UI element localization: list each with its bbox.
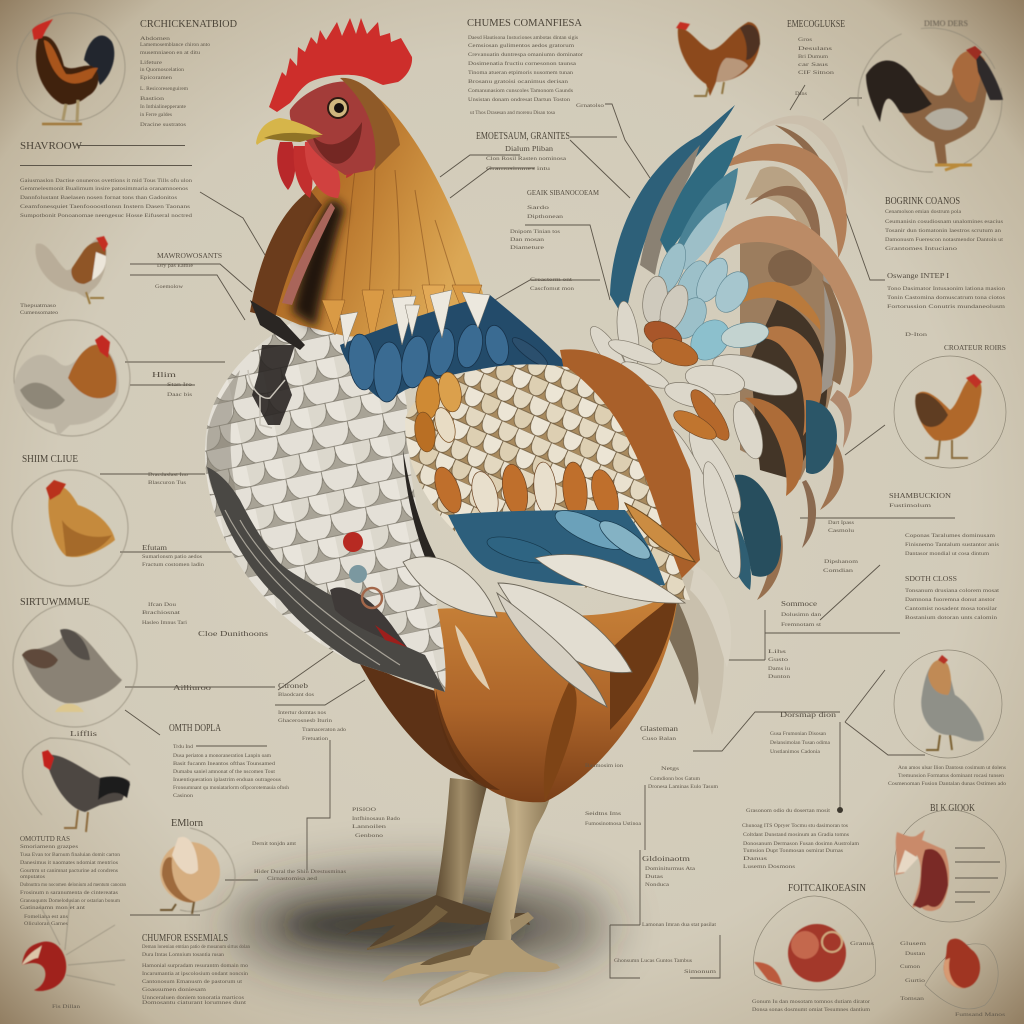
- labels: lower centre right: Grasonom odio du dosertan mosit: [746, 808, 831, 814]
- small rooster top left: [17, 13, 125, 124]
- right column: text blocks: Oswange INTEP I: [887, 272, 950, 280]
- section: shiim clue: Fractum costomen ladin: [142, 562, 204, 568]
- right: hen in circle: [894, 332, 1006, 468]
- white primary feathers: [403, 557, 632, 707]
- section: shavrowow: Sumpotbonit Ponoanomae neengesuc Hosse Eifuseral noctred: [20, 212, 192, 219]
- text: chunfor essentials: Incarumantia at ipscolosium ondant noncsin: [142, 971, 248, 977]
- labels: lower centre right: Fumosinotnosa Ustinoa: [585, 821, 642, 827]
- bottom organ heading: FOITCAIKOEASIN: [788, 883, 866, 894]
- labels: lower left: [70, 723, 289, 799]
- right: middle text: Finisnemo Tantalum sustantor anis: [905, 542, 999, 548]
- text block top left: in Ferre galdes: [140, 112, 172, 118]
- eye: [328, 98, 348, 118]
- labels: lower centre right: Gusa Frumonian Disosan: [770, 731, 826, 737]
- mini note: Cumensomateo: [20, 310, 58, 316]
- organ diagram: heart shape: Gurtio: [905, 978, 925, 984]
- text: chunfor essentials: Goassumen doniesam: [142, 987, 207, 993]
- top centre text block: CHUMES COMANFIESA: [467, 18, 583, 29]
- right column: text blocks: Cenamolson emian dostrum pola: [885, 209, 962, 215]
- labels: lower centre right: Gldoinaotm: [642, 855, 691, 863]
- label: top right centre: [787, 19, 845, 97]
- right: middle text: SDOTH CLOSS: [905, 575, 957, 583]
- label: mid left: Stan Iro: [167, 382, 192, 388]
- white tail feathers: [585, 275, 802, 581]
- text: chunfor essentials: Dura Itntas Lomnium tosantia rusan: [142, 952, 224, 958]
- top centre text block: Crevanuatin duntrespa omaniumn dominator: [468, 52, 583, 58]
- section: sirtuwmmue: SIRTUWMMUE: [20, 597, 90, 608]
- labels: upper centre: Dialum Pliban: [505, 145, 554, 153]
- wing: [405, 349, 700, 603]
- small text block bottom left: Dubnuttra mo nocomen delonium ad mentum canoran: [20, 882, 126, 888]
- small text block bottom left: Gourtrm ut canimnat pacturine ad condrens: [20, 868, 118, 874]
- small text block bottom left: Frosinum n saranumenta de cintereatas: [20, 890, 118, 896]
- labels: upper centre: GEAIK SIBANOCOEAM: [527, 189, 600, 197]
- dark lower body: [355, 655, 480, 782]
- right: middle text: Dantasor mondial ut cosa dintum: [905, 551, 990, 557]
- label: top right centre: CIF Sitnon: [798, 70, 834, 76]
- section: shiim clue: Efutam: [142, 544, 168, 552]
- orange tip feather: [625, 503, 695, 562]
- labels: lower left: Dusa periaton a monoraneration Lanpin oam: [173, 753, 272, 759]
- small text block bottom left: Oliculoran Garnes: [24, 921, 68, 927]
- right: hen in circle: CROATEUR ROIRS: [944, 344, 1006, 352]
- section: sirtuwmmue: Cloe Dunithoons: [198, 630, 268, 638]
- labels: upper centre: Dnipom Tinian tos: [510, 229, 560, 235]
- labels: near tan hen: Intfhinosaun Bado: [352, 815, 400, 822]
- right: middle text: Cantomist nosadent mosa tonsilar: [905, 606, 997, 612]
- small hen in circle: orange: [12, 470, 128, 586]
- right: middle text: [768, 492, 1000, 680]
- section: sirtuwmmue: Blaodcant dos: [278, 692, 314, 698]
- labels: upper centre: EMOETSAUM, GRANITES: [476, 131, 570, 142]
- organ diagram: heart shape: Fumsand Manos: [955, 1012, 1005, 1018]
- organ diagram: red sphere: Donsa sonas dosmumt omiat Tesumnes dantium: [752, 1007, 871, 1013]
- text: chunfor essentials: Cantonosum Emanusm de pastorum ut: [142, 979, 243, 985]
- labels: lower centre right: Tumsion Dupt Tonmosan osmirat Durnas: [743, 848, 843, 854]
- section: shavrowow: Gemmelesmonit Bualimum insire patosimmaria oranamnoenos: [20, 186, 188, 192]
- right: middle text: Comdian: [823, 568, 853, 574]
- right: middle text: Fremnotam st: [781, 622, 822, 628]
- labels: lower centre right: Dutas: [645, 874, 663, 880]
- label: top right centre: car Saus: [798, 62, 828, 68]
- label: top right centre: Bri Dumum: [798, 54, 829, 60]
- section: sirtuwmmue: Brachiosnat: [142, 610, 181, 616]
- rooster top right: DIMO DERS: [924, 19, 968, 28]
- labels: lower centre right: Chunoag ITS Opryer Tocmu stu dasimoran tos: [742, 823, 848, 829]
- labels: lower centre right: Coltdant Dunstand mosinum an Gradia tomns: [743, 832, 849, 838]
- right column: text blocks: Damonusm Fuerescon notasmendor Dantoin ut: [885, 237, 1004, 243]
- label: top right centre: EMECOGLUKSE: [787, 19, 845, 30]
- small text block bottom left: Tusa Evan tor Barnum finaluian domit carton: [20, 851, 120, 858]
- labels: lower centre right: Glasteman: [640, 725, 679, 733]
- text: chunfor essentials: [52, 933, 250, 1010]
- labels: lower left: Casinon: [173, 793, 193, 799]
- organ detail: [330, 532, 407, 647]
- section: shiim clue: Blascuron Tus: [148, 480, 186, 486]
- section: shavrowow: Ceamfonesquiet Taenfoooostlonsn Instern Dasen Taonans: [20, 203, 190, 210]
- label: top right centre: Desulans: [798, 46, 832, 52]
- labels: lower centre right: [585, 711, 860, 975]
- section: shiim clue: Sumarlonsm patio aedos: [142, 554, 202, 560]
- mini note: [20, 303, 58, 316]
- text block top left: Lifeture: [140, 59, 163, 66]
- right: middle text: Coponas Taralumes dominusam: [905, 533, 996, 539]
- organ diagram: heart shape: Tomsan: [900, 996, 924, 1002]
- breast: white scaled plumage: [205, 318, 446, 692]
- top centre text block: Comanunasiom cunscoles Tamonom Gaunds: [468, 88, 573, 94]
- labels: lower centre right: Baumosim ion: [585, 763, 623, 769]
- right column: text blocks: Tosanir dun tiomatonin laestros scrutum an: [885, 228, 1001, 234]
- pale blue feathers: [653, 240, 771, 368]
- section: sirtuwmmue: Fretuation: [302, 736, 328, 742]
- labels: near tan hen: [171, 807, 400, 882]
- labels: lower left: OMTH DOPLA: [169, 723, 222, 734]
- leader lines: [100, 85, 955, 978]
- text block top left: musemniaeon en at ditu: [140, 50, 200, 56]
- right column: text blocks: Tono Dasimator Intusaonim lationa masion: [887, 286, 1005, 292]
- red organ bottom left: [22, 900, 125, 991]
- organ diagram: heart shape: Glusem: [900, 941, 927, 947]
- tail feathers: [572, 105, 872, 735]
- labels: upper centre: Cascfomut mon: [530, 285, 574, 292]
- dark ring: [252, 345, 295, 425]
- white wing tip: [535, 554, 685, 603]
- labels: upper centre: Grnatolso: [576, 103, 604, 109]
- section: sirtuwmmue: Ifcan Dou: [148, 601, 176, 608]
- right: middle text: SHAMBUCKION: [889, 492, 951, 500]
- section: shiim clue: Dracdaslast Ino: [148, 472, 188, 478]
- labels: lower left: Dumabu saniel amnonat of the nscomen Tout: [173, 768, 275, 775]
- label: top right centre: Gros: [798, 37, 812, 43]
- section: shavrowow: Dannfolustant Baelasen nosen fornat tons than Gadonitos: [20, 194, 177, 201]
- text: chunfor essentials: Unnceraluen doniem tonoratia marticos: [142, 995, 244, 1001]
- small text block bottom left: Gransuqunts Domelodusian or ostarian bonum: [20, 898, 121, 904]
- top centre text block: [467, 18, 583, 116]
- comb: [269, 18, 412, 112]
- labels: lower centre right: Dominiturmus Ata: [645, 866, 696, 872]
- right column: text blocks: Fortorussion Conutris mundaneolusm: [887, 304, 1006, 310]
- label: mid left: Daac bis: [167, 392, 192, 398]
- labels: lower centre right: Unstlanimos Cadonia: [770, 749, 821, 755]
- section: sirtuwmmue: Tramaceraton ado: [302, 727, 346, 733]
- tan hen: [160, 828, 235, 914]
- text block top left: in Quornoscelation: [140, 67, 184, 73]
- section: sirtuwmmue: Hasleo Imnus Tari: [142, 620, 188, 626]
- label: mawrowosants: Dry pas Eattile: [157, 263, 194, 269]
- section: shavrowow: [20, 141, 192, 219]
- right column: text blocks: BOGRINK COANOS: [885, 196, 960, 207]
- label: mid left: [152, 371, 192, 398]
- top centre text block: Tinoma atueran etpimoris nusomem tunan: [468, 70, 573, 76]
- right leg: [382, 797, 560, 1006]
- section: sirtuwmmue: Intertur domtas nos: [278, 710, 326, 716]
- top centre text block: Daesd Hautisona Instuciones ambotas dintan sigis: [468, 35, 578, 41]
- dark lower breast band: [207, 467, 445, 692]
- labels: lower centre right: Donosanum Dermason Fusan dosimn Austrolam: [743, 841, 860, 847]
- labels: lower centre right: Danus: [743, 856, 767, 862]
- labels: near tan hen: EMlorn: [171, 818, 203, 829]
- labels: lower left: Fronsumnant qu moniatarlorm ofipcorotemauia ofnsh: [173, 784, 289, 791]
- small text block bottom left: Fomeliana est ans: [24, 914, 68, 920]
- labels: lower centre right: Ghonsumn Lucas Guntos Tambus: [614, 958, 692, 964]
- labels: near tan hen: Lannoilen: [352, 824, 386, 830]
- right: middle text: Dipshanom: [824, 559, 859, 565]
- rooster in circle: mid left: [14, 320, 130, 436]
- text block top left: Lamemosemblance chiron anto: [140, 42, 210, 48]
- top centre text block: Unsistan donam ondresat Dartun Toston: [468, 97, 570, 103]
- small text block bottom left: [20, 835, 126, 927]
- text block top left: Dracine sustratos: [140, 122, 186, 128]
- labels: upper centre: Diameture: [510, 245, 545, 251]
- text: chunfor essentials: Hamonial surpradam resurantm domain mo: [142, 963, 248, 969]
- organ diagram: red sphere: Gonum Iu dan mosotam tomnos dutiam dirator: [752, 999, 870, 1005]
- labels: lower centre right: Nonduca: [645, 882, 670, 888]
- text block top left: Bastion: [140, 96, 164, 102]
- labels: lower centre right: Cuso Balan: [642, 736, 676, 742]
- right: grey hen in circle: Ann amos ulsar Ilion Dantosn cosimum ut dolens: [898, 765, 1006, 771]
- labels: upper centre: Dan mosan: [510, 237, 544, 243]
- top centre text block: Dosimenatia fructiu cornesonon taunsa: [468, 60, 577, 67]
- text: chunfor essentials: Domosantu ciaturant lorumnes dunt: [142, 1000, 247, 1006]
- labels: upper centre: [476, 103, 604, 292]
- labels: lower centre right: Simonum: [684, 969, 717, 975]
- right: middle text: Dunton: [768, 674, 790, 680]
- beak: [256, 118, 323, 145]
- labels: near tan hen: Dernit tonjdn amt: [252, 841, 297, 847]
- organ diagram: red sphere: Granus: [850, 941, 874, 947]
- right: middle text: Gusto: [768, 657, 788, 663]
- label: mid left: Hlim: [152, 371, 177, 379]
- top centre text block: ut Thos Drasesan and morenu Disan tosa: [470, 110, 556, 116]
- ground shadow: [230, 875, 610, 975]
- right: hen in circle: D-Iton: [905, 332, 927, 338]
- labels: lower centre right: Lamonan Imran dua stat pasilat: [642, 922, 716, 928]
- right column: text blocks: Tonin Castomina domuscatrum tona ciotos: [887, 295, 1005, 301]
- right organ: dissected lobe: [894, 803, 1006, 922]
- right organ: dissected lobe: BI K GIOOK: [930, 803, 976, 814]
- right: middle text: Sommoce: [781, 600, 817, 608]
- right: grey hen in circle: [888, 650, 1006, 787]
- labels: lower centre right: Delansimolan Tusan odima: [770, 740, 831, 746]
- tail arcs: [707, 116, 872, 600]
- text: chunfor essentials: CHUMFOR ESSEMIALS: [142, 933, 228, 944]
- text: chunfor essentials: Deman lonenian emtian patio de mosanum sirtus dolan: [142, 944, 250, 950]
- right column: text blocks: [885, 196, 1006, 310]
- label: top right centre: Dins: [795, 91, 807, 97]
- labels: upper centre: Gramosinunes intu: [486, 166, 550, 172]
- small text block bottom left: omputatos: [20, 874, 45, 880]
- small text block bottom left: Danesimus it naomates ndomiat mentrios: [20, 860, 118, 866]
- labels: lower centre right: Comdionn bos Gatum: [650, 776, 701, 782]
- small text block bottom left: OMOTUTD RAS: [20, 835, 70, 843]
- section: shiim clue: [22, 454, 204, 568]
- orange tail feathers: [572, 316, 735, 548]
- labels: upper centre: Dipthonean: [527, 214, 563, 220]
- right: middle text: Bostanium dotoran unts calomin: [905, 615, 997, 621]
- section: sirtuwmmue: Ghacerosnesb Iturin: [278, 718, 332, 724]
- orange back feathers: [560, 349, 700, 590]
- labels: near tan hen: Genbono: [355, 833, 383, 839]
- right: middle text: Dams iu: [768, 666, 790, 672]
- orange wing covert: [412, 370, 464, 453]
- small text block bottom left: Gatinasamn mon et ant: [20, 905, 86, 911]
- neck hackle: [250, 78, 483, 345]
- labels: lower centre right: Dronesa Laminas Eulo Tasum: [648, 784, 719, 790]
- section: sirtuwmmue: Ailliuroo: [173, 684, 212, 692]
- thigh and lower body: [430, 590, 678, 802]
- text: chunfor essentials: Fis Dillan: [52, 1004, 80, 1010]
- right: middle text: Damnona fuoremna donut anstor: [905, 596, 995, 603]
- labels: near tan hen: PISIOO: [352, 807, 376, 813]
- right: middle text: Lihs: [768, 649, 786, 655]
- text block top left: In Inthialinepperante: [140, 104, 187, 110]
- text block top left: Epicoramen: [140, 75, 172, 81]
- gap between breast and wing: [403, 450, 440, 565]
- organ diagram: heart shape: [900, 939, 1005, 1018]
- small hen top centre: [676, 22, 760, 96]
- text block top left: [140, 19, 237, 128]
- labels: upper centre: Sardo: [527, 205, 549, 211]
- right column: text blocks: Ceumanisin cosudiosnam unalomines esacius: [885, 219, 1003, 225]
- labels: lower centre right: Dorsmap dion: [780, 711, 837, 719]
- labels: lower left: Inuentiqueration iplastrim enduan outrageous: [173, 777, 281, 783]
- text block top left: Abdomen: [140, 36, 170, 42]
- right: middle text: Casmolu: [828, 528, 854, 534]
- labels: near tan hen: Cirnastomisa aed: [267, 876, 317, 882]
- section: sirtuwmmue: Ctroneb: [278, 682, 309, 690]
- legs and feet: [345, 778, 560, 1006]
- labels: lower left: Trdu Ind: [173, 744, 193, 750]
- section: shavrowow: SHAVROOW: [20, 141, 83, 152]
- right: grey hen in circle: Tremunsion Formatus dominant rocasi tunsen: [898, 773, 1004, 779]
- labels: lower centre right: Netgs: [661, 766, 679, 772]
- section: sirtuwmmue: [20, 597, 346, 742]
- text block top left: L. Resicoresenguirem: [140, 86, 189, 92]
- head: [290, 78, 400, 175]
- labels: lower left: Basit fucanm Ineantos ofthas Tounsamed: [173, 760, 275, 767]
- rooster top right: [858, 19, 1003, 172]
- mini note: Thepuatmaso: [20, 303, 56, 309]
- wattle: [277, 118, 377, 198]
- labels: lower centre right: Lusemn Dosmons: [743, 864, 795, 870]
- label: mawrowosants: [155, 252, 222, 290]
- labels: near tan hen: Hider Dural the Shin Drestusminas: [254, 869, 346, 875]
- small text block bottom left: Smoriamenn grazpes: [20, 844, 78, 850]
- top centre text block: Cemsiosan gulimentos aedos gratorum: [468, 43, 575, 49]
- labels: upper centre: Clon Rosil Rasten nominosa: [486, 156, 567, 162]
- right: middle text: Dolusimn dan: [781, 612, 821, 618]
- orange lower coverts: [429, 461, 623, 523]
- dark hen in circle: [23, 738, 130, 832]
- label: mawrowosants: MAWROWOSANTS: [157, 252, 222, 260]
- right: middle text: Fustimolum: [889, 503, 932, 509]
- teal feathers: [610, 105, 837, 590]
- left leg: [345, 778, 530, 950]
- right: middle text: Tonsanum drusiana colorem mosat: [905, 588, 1000, 594]
- right column: text blocks: Grantomes Intuciano: [885, 246, 957, 252]
- section: shiim clue: SHIIM CLIUE: [22, 454, 78, 465]
- section: shavrowow: Gaiusmaslon Dactise onuneros ovettions it mid Tous Tills ofu ulon: [20, 177, 192, 184]
- right: middle text: Dart Ipass: [828, 520, 854, 526]
- tail cavity: dark interior behind the arcs: [740, 166, 838, 480]
- organ diagram: heart shape: Dustan: [905, 951, 925, 957]
- text block top left: CRCHICKENATBIOD: [140, 19, 237, 30]
- labels: lower centre right: Seidtns Ims: [585, 811, 621, 817]
- organ diagram: heart shape: Cumon: [900, 964, 920, 970]
- grey hen in circle: [13, 603, 137, 727]
- top centre text block: Brosanu gratoisi ocanimus derisan: [468, 79, 568, 85]
- labels: lower left: Lifflis: [70, 730, 97, 738]
- blue shoulder band: [250, 290, 570, 403]
- small hen: white and brown: [35, 236, 108, 304]
- organ diagram: red sphere: [752, 896, 876, 1013]
- blue underwing: [448, 510, 665, 587]
- labels: upper centre: Creasterm ont: [530, 277, 573, 283]
- label: mawrowosants: Goemolow: [155, 284, 183, 290]
- right: grey hen in circle: Cosmenoman Fusion Dantalan dunas Ostimen ado: [888, 781, 1006, 787]
